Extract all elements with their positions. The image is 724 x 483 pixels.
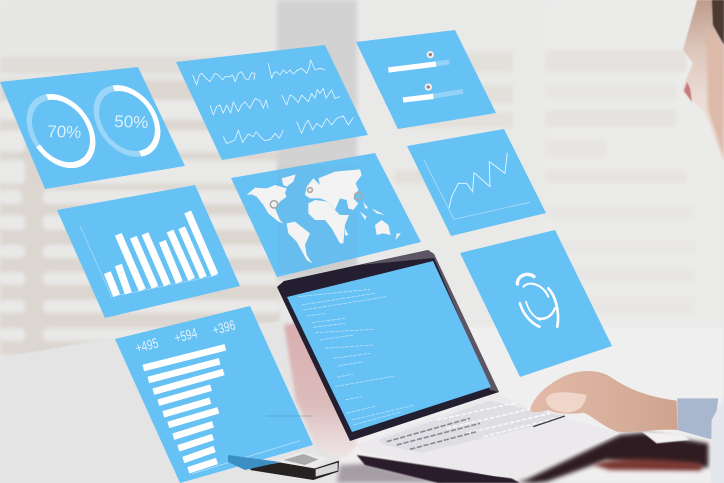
value +396: +396 [211,316,237,338]
panel: donut gauges [0,67,185,189]
panel: circular loader [460,230,612,377]
laptop [277,250,620,478]
screen bezel [277,250,499,441]
panel: sliders [356,30,496,129]
smartphone on desk [250,452,339,480]
label 70%: 70% [47,122,82,142]
person face [682,0,724,163]
panel: sparklines [176,45,368,160]
label 50%: 50% [114,112,149,132]
panel: line chart [407,129,546,236]
six sparkline charts [193,60,353,143]
person hand and sleeve [530,371,724,483]
value +495: +495 [134,334,160,356]
table dark reflection right of laptop [517,432,708,483]
panel: world map [231,153,421,277]
phone shadow seen through panel [228,455,280,470]
bars and axes [80,212,218,297]
side of face [706,25,724,160]
screen [287,261,491,432]
laptop reflection on table [284,322,358,458]
panel: ranked list [115,306,313,483]
white desk surface [0,320,724,483]
code lines on screen [298,289,415,425]
world map continents and pins [247,169,401,263]
ear shadow [684,82,692,102]
gauge 70% [18,92,104,170]
laptop base and keyboard [357,393,620,478]
slider bars and pins [388,51,463,100]
panel: bar chart [57,185,240,318]
gauge 50% [85,84,169,158]
value +594: +594 [173,324,199,346]
spinning ring icon [517,274,558,327]
horizontal bars [143,347,313,474]
hair [712,0,724,45]
desk shadow under laptop front [337,455,520,483]
line chart and axes [424,153,530,219]
